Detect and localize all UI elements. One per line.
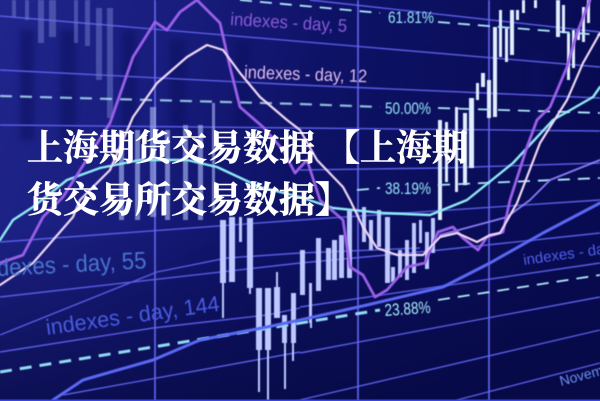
day 55 teal curve — [0, 87, 600, 240]
label: day 12: indexes - day, 12 — [244, 62, 367, 86]
label: 38.19%: 38.19% — [385, 179, 431, 198]
title: 货交易所交易数据】 — [27, 180, 351, 220]
day 12 lavender curve — [0, 33, 600, 285]
day 200 blue curve — [53, 203, 600, 400]
label: 50.00%: 50.00% — [385, 99, 431, 118]
title: 上海期货交易数据 【上海期 — [27, 128, 468, 168]
lower purple curve — [440, 160, 600, 235]
bottom edge line — [0, 400, 600, 401]
label: 23.88%: 23.88% — [384, 298, 431, 320]
label: day 144: indexes - day, 144 — [44, 291, 221, 340]
label: 61.81%: 61.81% — [388, 8, 434, 27]
day 5 purple curve — [0, 0, 590, 297]
label: day 5: indexes - day, 5 — [230, 9, 348, 36]
